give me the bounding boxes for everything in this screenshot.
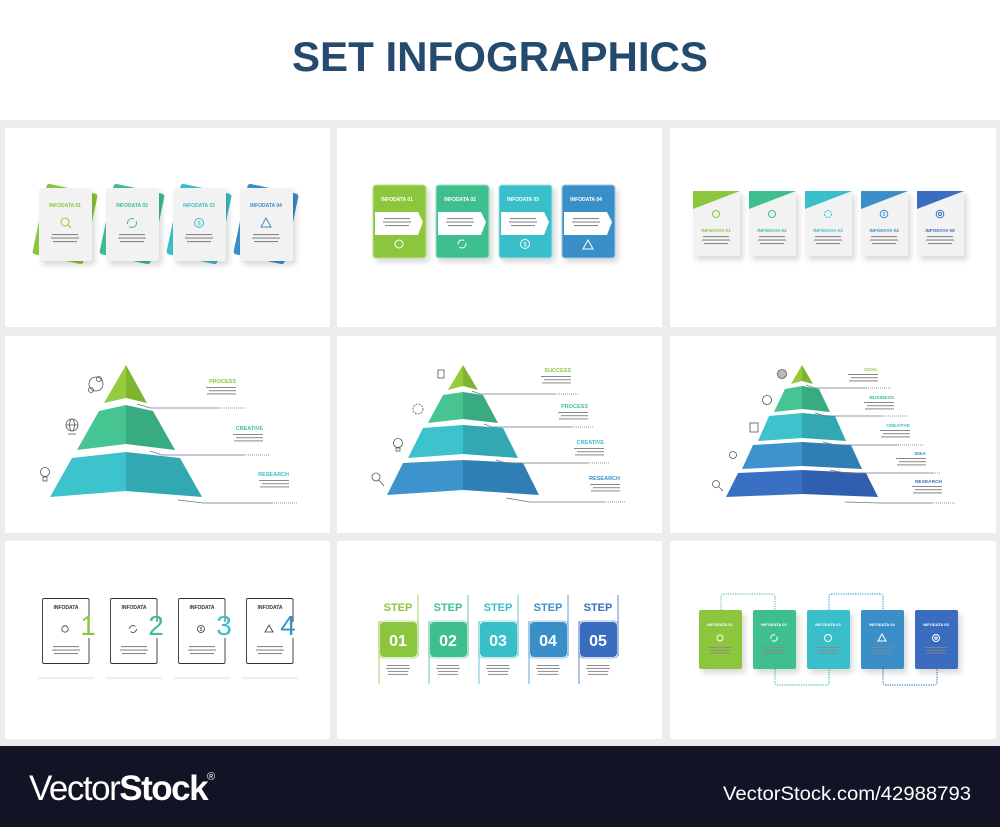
labels: RESEARCH [915,479,943,485]
card 1: 1 [80,610,96,641]
leader lines [472,391,626,502]
step 5 [579,595,618,684]
labels: SUCCESS [544,368,571,374]
step 3: STEP [484,602,512,614]
labels: PROCESS [561,404,588,410]
card 3: INFODATA 03 [813,228,843,233]
box 2 [753,610,796,669]
step 3: 03 [489,633,507,650]
labels: GOAL [864,367,878,373]
box 3 [807,610,850,669]
box 5 [915,610,958,669]
pyramid [726,365,878,497]
card 5: INFODATA 05 [925,228,955,233]
icons [40,376,103,481]
card 3: $ [523,242,527,248]
card 4 [861,191,908,256]
panel: 3-level pyramid [5,336,330,533]
panel: colored cards with arrow bands [337,128,662,327]
card 4 [562,185,615,258]
icons [712,370,786,491]
card 3: INFODATA 03 [507,197,539,203]
card 3 [174,598,232,679]
step 4: STEP [534,602,562,614]
card 4: INFODATA 04 [869,228,899,233]
title: SET INFOGRAPHICS [292,33,708,80]
card 1: INFODATA 01 [701,228,731,233]
card 3: INFODATA 03 [183,203,215,209]
box 4: INFODATA 04 [869,622,896,627]
step 5: STEP [584,602,612,614]
card 2 [436,185,489,258]
card 1 [373,185,426,258]
card 1 [693,191,740,256]
card 3 [166,183,232,265]
labels: BUSINESS [869,395,895,401]
card 4 [242,598,298,679]
card 3: 3 [216,610,232,641]
labels: CREATIVE [236,426,263,432]
card 1 [32,183,98,265]
labels [541,368,620,491]
panel: 5-level pyramid [670,336,996,533]
leader lines [806,385,955,503]
pyramid [50,365,202,497]
panel: rotated cards [5,128,330,327]
logo: ® [207,771,215,783]
logo: VectorStock [29,769,207,808]
step 2: 02 [439,633,457,650]
step 1: 01 [389,633,407,650]
card 1: INFODATA [53,605,79,611]
card 2: INFODATA [121,605,147,611]
labels [206,379,289,487]
labels: CREATIVE [886,423,911,429]
step 1 [379,595,418,684]
box 1: INFODATA 01 [707,622,734,627]
card 4: INFODATA [257,605,283,611]
panel: connected boxes [670,541,996,739]
labels: PROCESS [209,379,236,385]
box 5: INFODATA 05 [923,622,950,627]
card 2: INFODATA 02 [757,228,787,233]
card 2: 2 [148,610,164,641]
panel: cards with corner tabs [670,128,996,327]
card 4 [233,183,299,265]
card 3: $ [197,222,201,228]
box 1 [699,610,742,669]
card 4: INFODATA 04 [570,197,602,203]
card 3: INFODATA [189,605,215,611]
card 4: $ [883,212,886,218]
panel: outline cards with numbers [5,541,330,739]
box 2: INFODATA 02 [761,622,788,627]
labels: IDEA [915,451,927,457]
labels: RESEARCH [589,476,620,482]
card 2 [99,183,165,265]
card 3 [499,185,552,258]
step 1: STEP [384,602,412,614]
card 4: 4 [280,610,296,641]
box 4 [861,610,904,669]
footer bar [0,746,1000,827]
box 3: INFODATA 03 [815,622,842,627]
step 2 [429,595,468,684]
card 3: $ [200,627,203,633]
card 2 [106,598,164,679]
labels: RESEARCH [258,472,289,478]
pyramid [387,365,539,495]
card 1: INFODATA 01 [381,197,413,203]
panel: steps [337,541,662,739]
step 4: 04 [539,633,557,650]
step 5: 05 [589,633,607,650]
card 1 [38,598,96,679]
labels [848,367,943,493]
card 2 [749,191,796,256]
icons [372,370,444,486]
card 4: INFODATA 04 [250,203,282,209]
panel: 4-level pyramid [337,336,662,533]
card 2: INFODATA 02 [116,203,148,209]
image id: VectorStock.com/42988793 [723,784,971,805]
step 4 [529,595,568,684]
card 3 [805,191,852,256]
card 5 [917,191,964,256]
step 3 [479,595,518,684]
labels: CREATIVE [577,440,604,446]
card 2: INFODATA 02 [444,197,476,203]
step 2: STEP [434,602,462,614]
card 1: INFODATA 01 [49,203,81,209]
leader lines [137,404,298,503]
connectors [721,594,937,685]
